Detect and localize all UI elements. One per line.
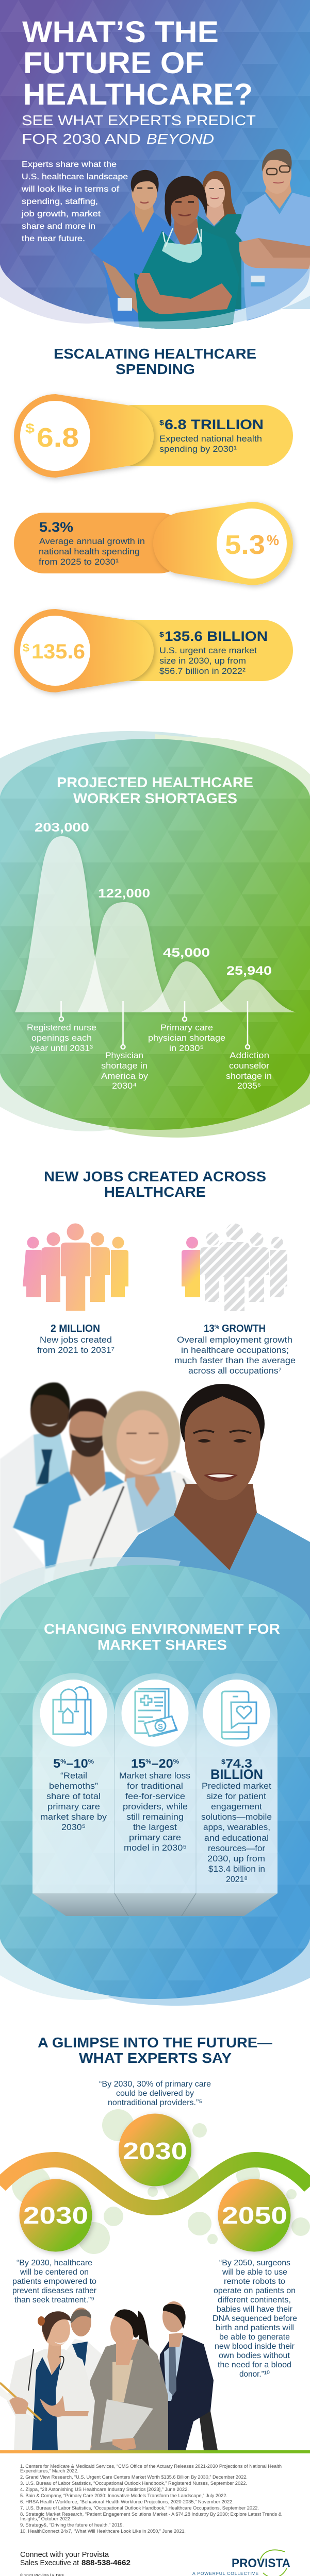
jobs text left: 2 MILLION (51, 1323, 100, 1334)
card: retail (32, 1673, 115, 1893)
stat pill: 135.6 billion (14, 609, 293, 692)
big number (25, 420, 79, 453)
panel: worker shortages (0, 731, 310, 1138)
footnotes: 9. Strategy&, “Driving the future of health,” 2019. (20, 2522, 124, 2528)
jobs text right: Overall employment growth (177, 1335, 292, 1345)
card: fee for service (115, 1673, 196, 1893)
panel heading (57, 774, 253, 806)
card text: Predicted market (202, 1781, 271, 1791)
quote: patients empowered (12, 2259, 97, 2304)
stat text: $ (159, 418, 164, 427)
card text (201, 1757, 272, 1884)
card text: engagement (211, 1802, 262, 1811)
heading: glimpse into the future: A GLIMPSE INTO THE FUTURE— (38, 2035, 273, 2050)
big number (225, 530, 279, 560)
card text: still remaining (126, 1812, 184, 1822)
chart labels: in 2030⁵ (169, 1043, 204, 1053)
chart labels: openings each (31, 1033, 92, 1043)
quote: patients empowered: prevent diseases rather (12, 2286, 97, 2295)
chart labels: Addiction (230, 1050, 269, 1060)
stat text: 5.3% (39, 519, 73, 535)
quote: surgeons: birth and patients will (216, 2324, 294, 2332)
contact block: Connect with your Provista (20, 2550, 109, 2559)
photo: healthcare team (91, 149, 310, 330)
card: patient engagement (196, 1673, 278, 1893)
quote: surgeons: operate on patients on (214, 2286, 296, 2295)
quote: patients empowered: “By 2030, healthcare (17, 2259, 92, 2267)
chart labels: year until 2031³ (30, 1043, 93, 1053)
jobs text right (174, 1323, 296, 1376)
card text: –20 (151, 1757, 173, 1771)
chart labels: Primary care (160, 1023, 213, 1032)
taper with circle (14, 609, 154, 692)
man behind in coat (63, 2308, 105, 2450)
white circle (217, 509, 287, 579)
jobs text right: much faster than the average (174, 1355, 296, 1365)
stat text: Expected national health (159, 434, 262, 444)
heading: new jobs: HEALTHCARE (104, 1184, 206, 1200)
card text: for traditional (127, 1781, 183, 1791)
chart labels: 2030⁴ (112, 1081, 137, 1091)
card text: $ (221, 1758, 226, 1766)
chart labels: shortage in (101, 1061, 148, 1071)
hero intro paragraph: share and more in (22, 222, 95, 231)
chart numbers: 45,000 (163, 946, 210, 960)
stat pill: 5.3 percent (14, 502, 293, 585)
quote: surgeons: be able to generate (219, 2333, 290, 2342)
stat text: $ (159, 630, 164, 638)
stat text (159, 629, 268, 676)
card text: share of total (46, 1791, 101, 1801)
back curves (0, 731, 217, 799)
stat text: national health spending (39, 547, 140, 556)
panel heading (44, 1621, 280, 1653)
big number: $ (23, 641, 29, 654)
stat pill: 6.8 trillion (14, 394, 293, 478)
badge: 2030 center (119, 2113, 191, 2187)
man in blue scrubs (13, 1399, 126, 1569)
quote: surgeons: the need for a blood (218, 2361, 291, 2369)
panel background (0, 1565, 310, 1999)
panel: market shares (0, 1557, 310, 2006)
quote: surgeons: “By 2050, surgeons (219, 2259, 290, 2267)
divider band (0, 2450, 310, 2453)
quote: nontraditional providers (99, 2080, 211, 2107)
jobs text right: 13 (204, 1323, 215, 1334)
hero intro paragraph: will look like in terms of (21, 185, 120, 194)
card text: “Retail (60, 1771, 87, 1781)
footnotes: 6. HRSA Health Workforce, “Behavioral Health Workforce Projections, 2020-2035,” November 2022. (20, 2499, 234, 2505)
chart labels (27, 1023, 272, 1091)
woman in teal with mask (118, 176, 239, 330)
cards base (32, 1893, 278, 1916)
contact block: Sales Executive at (20, 2558, 79, 2567)
back curves (0, 1557, 181, 1628)
quote: surgeons: new blood inside their (215, 2342, 295, 2351)
big number: 135.6 (31, 640, 85, 663)
chart labels: physician shortage (148, 1033, 225, 1043)
badge: 2050 right: 2050 (222, 2202, 287, 2229)
hero intro paragraph (21, 160, 128, 243)
stat text (159, 417, 264, 454)
footnotes: 3. U.S. Bureau of Labor Statistics, “Occupational Outlook Handbook,” Registered Nurses, September 2022. (20, 2481, 247, 2486)
hero intro paragraph: job growth, market (21, 210, 101, 218)
footnotes: 1. Centers for Medicare & Medicaid Services, “CMS Office of the Actuary Releases 2021-2030 Projections of National Health (20, 2464, 282, 2469)
quote: surgeons: different continents, (218, 2296, 291, 2304)
quote: surgeons: own bodies without (219, 2351, 290, 2360)
heading: new jobs: NEW JOBS CREATED ACROSS (44, 1168, 266, 1184)
translucent curve overlay on photo (108, 264, 310, 329)
chart: bell curves (15, 836, 296, 1012)
colored person (182, 1236, 200, 1297)
footnotes: 4. Zippa, “28 Astonishing US Healthcare Industry Statistics [2023],” June 2022. (20, 2487, 189, 2493)
man on right (235, 149, 310, 330)
woman in front (117, 1384, 310, 1621)
icon: phone and heart (203, 1680, 270, 1747)
card text: primary care (47, 1802, 100, 1811)
footnotes: Insights,” October 2022. (20, 2516, 72, 2522)
card text: 15 (131, 1757, 145, 1771)
hero back curve right (108, 296, 310, 329)
card text: model in 2030⁵ (124, 1843, 187, 1853)
card text: solutions—mobile (201, 1812, 272, 1822)
panel background (0, 739, 310, 1130)
timeline wave (0, 2160, 310, 2208)
chart labels: America by (101, 1071, 149, 1081)
chart labels: 2035⁶ (237, 1081, 261, 1091)
hero subtitle: BEYOND (146, 131, 214, 147)
stat text: U.S. urgent care market (159, 646, 257, 655)
logo: provista: A POWERFUL COLLECTIVE (192, 2571, 258, 2576)
stat text (39, 519, 145, 567)
card text: % (60, 1758, 67, 1765)
quote: patients empowered: than seek treatment.”⁹ (14, 2296, 94, 2304)
icon: five people one colored (182, 1223, 287, 1311)
hero subtitle: FOR 2030 AND (22, 131, 141, 147)
hero subtitle: SEE WHAT EXPERTS PREDICT (22, 112, 256, 128)
chart labels: Registered nurse (27, 1023, 96, 1032)
quote: surgeons (213, 2259, 297, 2379)
card text: providers, while (123, 1802, 188, 1811)
white circle (20, 616, 90, 686)
hero intro paragraph: spending, staffing, (22, 197, 98, 206)
heading: escalating healthcare spending: SPENDING (116, 361, 195, 377)
chart labels: shortage in (226, 1071, 272, 1081)
jobs text right: in healthcare occupations; (181, 1345, 289, 1355)
man in white coat (0, 1382, 71, 1584)
chart labels: counselor (229, 1061, 269, 1071)
jobs text right: GROWTH (219, 1323, 266, 1334)
stat text: $56.7 billion in 2022² (159, 666, 246, 676)
contact block (20, 2550, 130, 2576)
badge: 2030 center: 2030 (123, 2138, 187, 2164)
hero subtitle (22, 112, 256, 147)
stat text: 135.6 BILLION (165, 629, 268, 644)
panel: hero (0, 0, 310, 330)
jobs text left (37, 1323, 115, 1355)
card text: market share by (40, 1812, 107, 1822)
heading: glimpse into the future (38, 2035, 273, 2066)
heading: escalating healthcare spending (54, 346, 256, 377)
card text: 2030⁵ (61, 1822, 86, 1832)
hero background (0, 0, 310, 321)
card text: 74.3 (225, 1757, 252, 1771)
stat text: Average annual growth in (39, 536, 145, 546)
quote: nontraditional providers: nontraditional providers.”⁵ (108, 2098, 202, 2107)
quote: patients empowered: patients empowered to (12, 2277, 96, 2286)
panel heading: WORKER SHORTAGES (73, 790, 237, 806)
hero title (22, 15, 253, 111)
card text: % (145, 1758, 152, 1765)
heading: glimpse into the future: WHAT EXPERTS SAY (79, 2050, 232, 2066)
big number: 6.8 (37, 423, 79, 453)
hero title: HEALTHCARE? (23, 78, 253, 111)
hero intro paragraph: U.S. healthcare landscape (22, 173, 128, 181)
quote: surgeons: remote robots to (224, 2277, 285, 2286)
footnotes: 10. HealthConnect 24x7, “What Will Healthcare Look Like in 2050,” June 2021. (20, 2529, 186, 2534)
chart numbers: 25,940 (226, 964, 272, 978)
chart labels: Physician (105, 1050, 143, 1060)
man in blue scrubs (91, 170, 173, 330)
quote: surgeons: donor.”¹⁰ (239, 2370, 270, 2379)
icon: document and money (122, 1680, 189, 1747)
stat text: spending by 2030¹ (159, 444, 237, 454)
chart numbers (35, 821, 272, 978)
card text: 2030, up from (207, 1854, 265, 1863)
quote: nontraditional providers: “By 2030, 30% of primary care (99, 2080, 211, 2089)
chart pins (59, 1001, 250, 1049)
chart numbers: 122,000 (98, 887, 150, 901)
photo: workers row (0, 1382, 310, 1649)
taper with circle (14, 394, 154, 478)
big number: $ (25, 420, 35, 436)
card text: primary care (129, 1833, 181, 1842)
card text: % (173, 1758, 179, 1765)
hero intro paragraph: Experts share what the (22, 160, 117, 169)
panel heading: MARKET SHARES (97, 1637, 227, 1653)
footnotes (20, 2464, 282, 2534)
card text: the largest (133, 1822, 177, 1832)
card text: 2021⁸ (226, 1874, 248, 1884)
badge: 2030 left: 2030 (23, 2202, 88, 2229)
icon: document and money: S (158, 1722, 163, 1731)
card text: size for patient (206, 1791, 266, 1801)
card text: –10 (66, 1757, 88, 1771)
card text: 5 (53, 1757, 60, 1771)
big number: % (267, 532, 279, 548)
card text (119, 1757, 190, 1853)
quote: nontraditional providers: could be delivered by (116, 2089, 194, 2098)
icon: shopping bag (40, 1680, 107, 1747)
footnotes: 7. U.S. Bureau of Labor Statistics, “Occupational Outlook Handbook,” Healthcare Occupations, September 2022. (20, 2505, 259, 2511)
card text: apps, wearables, (203, 1822, 270, 1832)
hero title: FUTURE OF (23, 46, 204, 80)
jobs text right: across all occupations⁷ (188, 1366, 282, 1376)
woman in back (196, 171, 241, 309)
quote: patients empowered: will be centered on (20, 2268, 89, 2277)
card text: BILLION (210, 1767, 263, 1782)
blond woman in white coat (55, 1390, 195, 1567)
decorative bubbles (12, 2109, 310, 2254)
panel heading: PROJECTED HEALTHCARE (57, 774, 253, 790)
footnotes: 5. Bain & Company, “Primary Care 2030: Innovative Models Transform the Landscape,” July 2022. (20, 2493, 227, 2499)
quote: surgeons: will be able to use (222, 2268, 287, 2277)
jobs text left: from 2021 to 2031⁷ (37, 1345, 115, 1355)
contact block: 888-538-4662 (81, 2558, 130, 2567)
hero intro paragraph: the near future. (22, 234, 85, 243)
hero title: WHAT’S THE (22, 15, 219, 49)
heading: escalating healthcare spending: ESCALATING HEALTHCARE (54, 346, 256, 362)
quote: surgeons: babies will have their (217, 2305, 293, 2314)
stat text: size in 2030, up from (159, 656, 246, 666)
logo: provista: PROVISTA (232, 2556, 290, 2570)
card text: and educational (204, 1833, 269, 1843)
footnotes: 2. Grand View Research, “U.S. Urgent Care Centers Market Worth $135.6 Billion By 2030,” December 2022. (20, 2475, 248, 2480)
card text: % (88, 1758, 94, 1765)
stat text: 6.8 TRILLION (165, 417, 264, 432)
logo: provista (192, 2550, 290, 2576)
card text: resources—for (208, 1843, 265, 1853)
badge: 2030 left (20, 2179, 92, 2251)
jobs text left: New jobs created (40, 1335, 112, 1345)
stat text: from 2025 to 2030¹ (39, 557, 119, 567)
woman doctor (0, 2311, 95, 2450)
card text (40, 1757, 107, 1832)
card text: $13.4 billion in (208, 1864, 265, 1874)
woman center in gray jacket (81, 2309, 168, 2450)
heading: new jobs (44, 1168, 266, 1200)
card text: Market share loss (119, 1771, 190, 1781)
footnotes: Expenditures,” March 2022. (20, 2468, 78, 2474)
card text: fee-for-service (125, 1791, 185, 1801)
taper with circle (153, 502, 293, 585)
badge: 2050 right (218, 2179, 291, 2251)
hero back curve left (0, 258, 124, 324)
chart numbers: 203,000 (35, 821, 89, 835)
panel heading: CHANGING ENVIRONMENT FOR (44, 1621, 280, 1637)
quote: surgeons: DNA sequenced before (213, 2314, 297, 2323)
card text: behemoths” (49, 1781, 98, 1791)
footnotes: 8. Strategic Market Research, “Patient Engagement Solutions Market - A $74.28 Industry By 2030; Explore Latest Trends & (20, 2512, 282, 2517)
big number: 5.3 (225, 530, 265, 560)
man in suit (156, 2301, 218, 2450)
photo: professionals group (0, 2301, 218, 2450)
white circle (20, 401, 90, 471)
jobs text right: % (215, 1324, 219, 1330)
icon: five people all colored (23, 1223, 128, 1311)
